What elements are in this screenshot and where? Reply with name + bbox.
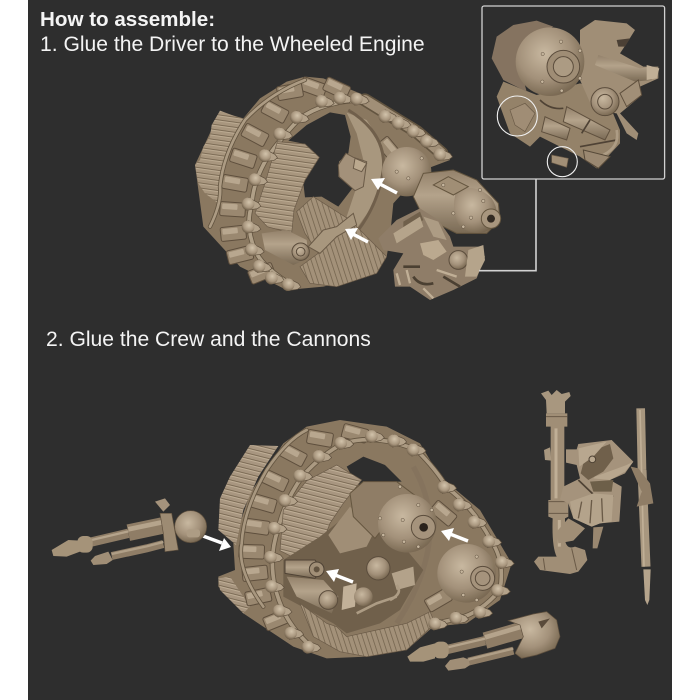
step 1 text: 1. Glue the Driver to the Wheeled Engine — [40, 32, 425, 56]
boiler dome — [492, 21, 553, 92]
inset model: driver underside — [492, 20, 659, 168]
central ring — [397, 467, 430, 623]
highlight circle: small tab — [547, 147, 577, 177]
torso, arm and head — [580, 20, 658, 140]
hand on the pipe — [544, 447, 551, 461]
crew figure and engine — [283, 507, 423, 633]
main boiler — [350, 482, 437, 553]
spear — [640, 408, 651, 605]
glue tab large — [510, 103, 535, 132]
arrow: cannon to wheel — [203, 536, 231, 551]
wheel body — [218, 420, 512, 658]
rear boiler — [437, 544, 496, 603]
arrow: crew mount right — [441, 528, 468, 541]
pipe — [534, 413, 587, 574]
small boiler at lower left — [262, 230, 308, 265]
glue tab small — [552, 155, 568, 167]
upper barrel — [52, 522, 165, 557]
step 2 text: 2. Glue the Crew and the Cannons — [46, 328, 371, 350]
wheel body — [195, 77, 450, 290]
lower barrel — [91, 542, 163, 565]
highlight circle: large tab — [497, 96, 537, 136]
mounting block on the ring — [338, 153, 367, 191]
outer left tread planks — [218, 445, 278, 545]
arrow: driver mount lower — [345, 228, 368, 242]
pipe crown — [541, 390, 571, 413]
arrow: driver mount upper — [371, 178, 397, 193]
outer left tread planks — [195, 111, 243, 203]
lower tread planks — [297, 197, 387, 287]
main boiler — [395, 157, 501, 233]
model: assembled wheel, step 2 — [218, 420, 515, 658]
lower barrel — [445, 649, 513, 671]
driver figure and pipes — [378, 208, 485, 300]
lower left planks — [218, 577, 250, 613]
wheel studs — [241, 91, 454, 293]
model: assembled wheel with driver, step 1 — [195, 76, 501, 300]
model: left cannon — [52, 498, 207, 565]
inner tread planks left — [255, 142, 319, 233]
clawed foot and tail — [557, 518, 585, 543]
rear boiler dome — [382, 147, 431, 196]
model: lower right cannon — [407, 612, 560, 671]
cannon housing — [508, 612, 560, 658]
wheel studs — [263, 430, 515, 655]
upper barrel — [407, 627, 522, 662]
track blocks — [220, 76, 404, 285]
model: crew member with pipe and spear — [534, 390, 653, 605]
bottom tread planks — [300, 603, 435, 657]
crew arm — [631, 467, 653, 507]
heading: how to assemble: How to assemble: — [40, 8, 215, 30]
cannon housing — [160, 513, 178, 552]
inner tread planks — [280, 465, 362, 559]
inner wheel ring — [347, 113, 385, 228]
chain links — [210, 80, 442, 285]
arrow: cannon mount centre — [326, 569, 353, 582]
track blocks — [239, 423, 458, 631]
lower engine and pipes — [497, 82, 620, 168]
hole through the wheel — [347, 457, 402, 485]
crew torso and helmet — [560, 440, 633, 527]
inset detail frame with connector — [479, 6, 665, 271]
chain links — [241, 430, 501, 648]
